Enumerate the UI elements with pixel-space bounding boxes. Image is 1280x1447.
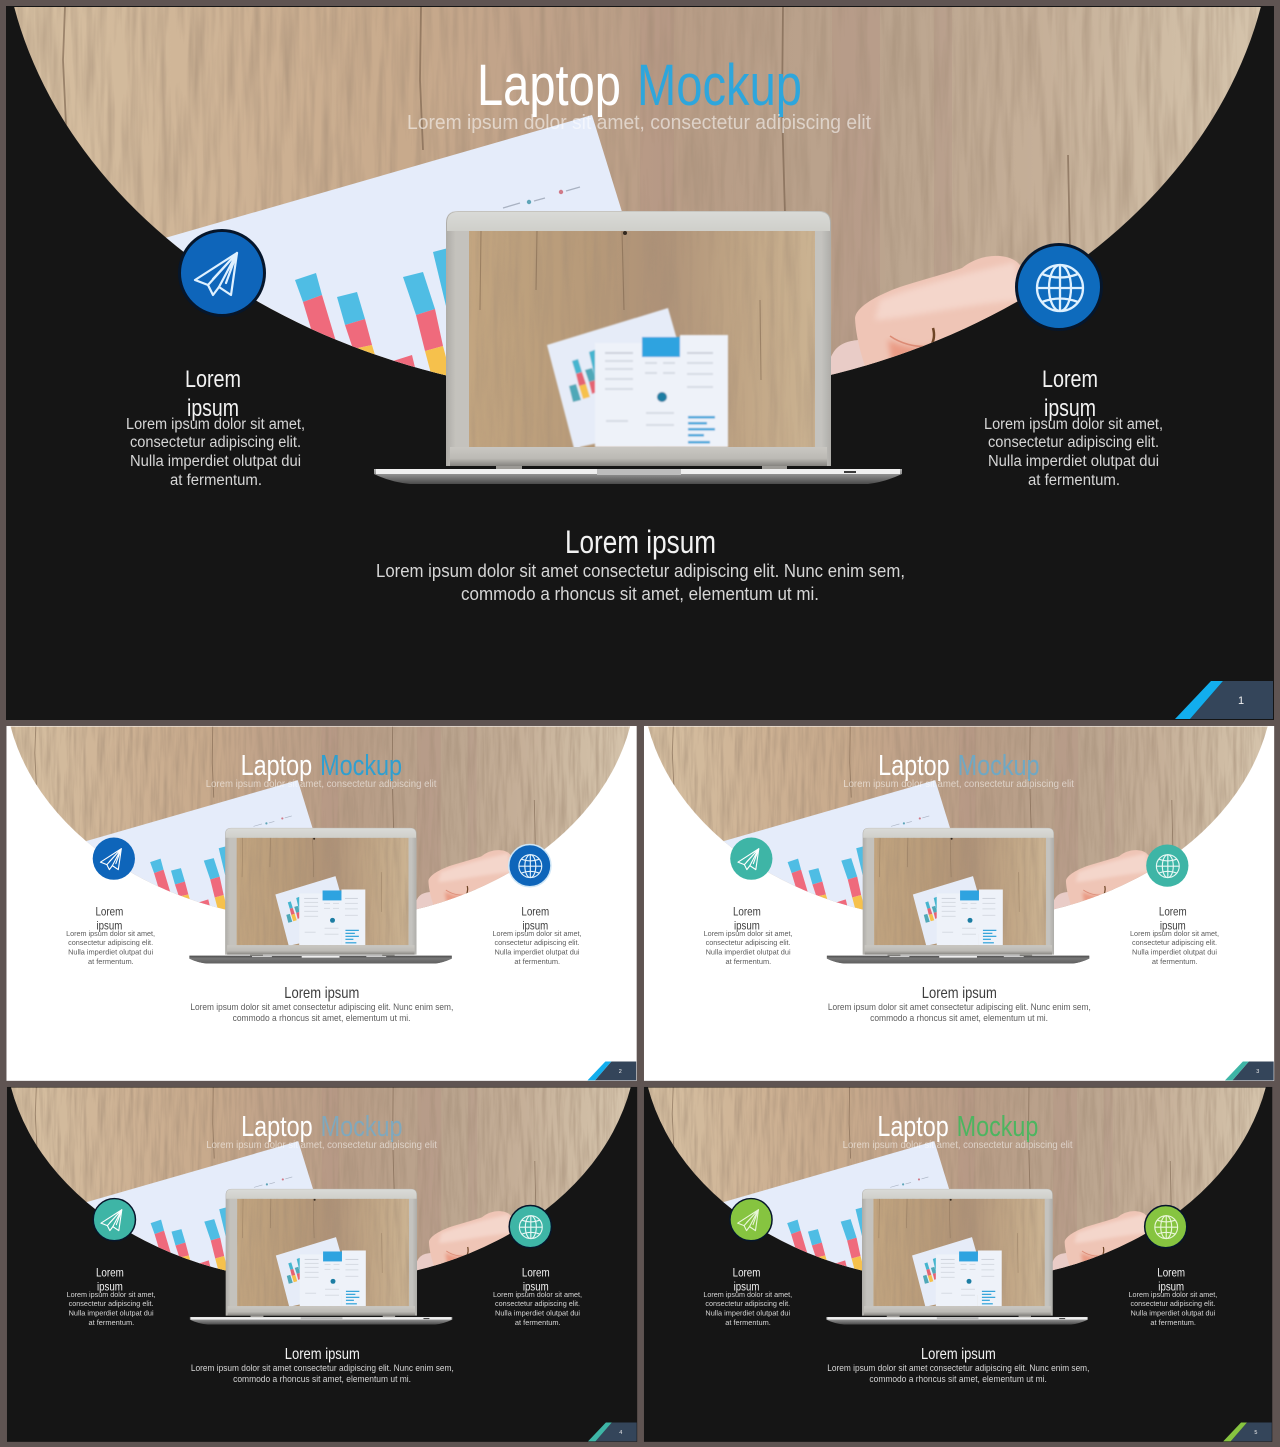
right feature text: Nulla imperdiet olutpat dui (1132, 948, 1217, 957)
left feature text: at fermentum. (170, 472, 262, 489)
panel: slide 2 white with blue accents (4, 723, 640, 1081)
left feature text (126, 366, 305, 489)
title (241, 1111, 403, 1143)
left feature text (703, 1265, 792, 1327)
right feature text: at fermentum. (1028, 472, 1120, 489)
left feature text: Lorem (733, 1265, 760, 1279)
title: Laptop (477, 53, 621, 118)
left feature text: Lorem (95, 904, 123, 918)
right feature text: consectetur adipiscing elit. (495, 1299, 580, 1308)
title: Laptop (241, 750, 312, 782)
centre text block: Lorem ipsum dolor sit amet consectetur adipiscing elit. Nunc enim sem, (828, 1002, 1091, 1012)
left feature text: Lorem (96, 1265, 124, 1279)
right feature text: ipsum (523, 1280, 549, 1294)
centre text block: commodo a rhoncus sit amet, elementum ut mi. (870, 1013, 1048, 1023)
right feature text: consectetur adipiscing elit. (1131, 1299, 1215, 1308)
left feature text: at fermentum. (725, 957, 771, 966)
right feature text: Nulla imperdiet olutpat dui (495, 948, 580, 957)
right feature text (493, 904, 582, 966)
page number tab: 1 (1238, 695, 1244, 707)
right feature text (984, 366, 1163, 489)
title: Mockup (957, 1111, 1038, 1143)
right feature text: at fermentum. (515, 1318, 561, 1327)
title: Mockup (320, 750, 402, 782)
page number tab: 3 (1256, 1069, 1259, 1075)
left feature text (704, 904, 793, 966)
right feature text: at fermentum. (514, 957, 560, 966)
right feature text: Nulla imperdiet olutpat dui (495, 1309, 580, 1318)
icon: globe badge (509, 845, 551, 887)
left feature text: consectetur adipiscing elit. (69, 1299, 154, 1308)
title: Laptop (878, 750, 950, 782)
page number tab (588, 1422, 637, 1441)
right feature text: consectetur adipiscing elit. (1132, 938, 1217, 947)
right feature text: Lorem (1042, 366, 1098, 393)
laptop base shading for light slide (189, 956, 452, 964)
right feature text: Lorem (521, 904, 549, 918)
right feature text: ipsum (1160, 919, 1186, 933)
hero artwork: wooden desk with laptop (0, 0, 1280, 484)
title (877, 1111, 1038, 1143)
icon: paper plane badge (93, 1199, 135, 1241)
page number tab: 4 (619, 1430, 622, 1436)
centre text block: commodo a rhoncus sit amet, elementum ut mi. (869, 1374, 1047, 1384)
left feature text: ipsum (187, 395, 239, 422)
right feature text: at fermentum. (1150, 1318, 1196, 1327)
centre text block (828, 985, 1091, 1023)
right feature text: Lorem ipsum dolor sit amet, (984, 416, 1163, 433)
left feature text: Lorem ipsum dolor sit amet, (126, 416, 305, 433)
centre text block: Lorem ipsum (284, 985, 359, 1002)
left feature text: ipsum (97, 1280, 123, 1294)
title: Mockup (637, 53, 802, 118)
centre text block (376, 524, 905, 604)
subtitle: Lorem ipsum dolor sit amet, consectetur adipiscing elit (407, 112, 871, 134)
left feature text: Nulla imperdiet olutpat dui (130, 453, 301, 470)
icon: globe badge (1146, 845, 1188, 887)
icon: paper plane badge (93, 838, 135, 880)
icon: globe badge (509, 1206, 551, 1248)
title (241, 750, 402, 782)
centre text block: Lorem ipsum (285, 1346, 360, 1363)
page number tab (1223, 1422, 1272, 1441)
panel: slide 1 large dark slide (0, 0, 1280, 720)
centre text block (190, 985, 453, 1023)
right feature text: consectetur adipiscing elit. (495, 938, 580, 947)
hero artwork (641, 723, 1277, 964)
panel: slide 5 dark with green accents (641, 1084, 1275, 1442)
icon: paper plane badge (180, 230, 264, 316)
left feature text: consectetur adipiscing elit. (130, 434, 301, 451)
right feature text: Lorem ipsum dolor sit amet, (493, 1290, 582, 1299)
subtitle: Lorem ipsum dolor sit amet, consectetur adipiscing elit (843, 1140, 1073, 1151)
left feature text: Lorem ipsum dolor sit amet, (704, 929, 793, 938)
title: Laptop (241, 1111, 313, 1143)
laptop base shading for light slide (827, 956, 1089, 964)
title: Mockup (958, 750, 1040, 782)
centre text block: Lorem ipsum (921, 1346, 996, 1363)
laptop mockup (374, 211, 902, 484)
page number tab (1225, 1061, 1274, 1080)
page number tab (1175, 681, 1273, 719)
left feature text: ipsum (734, 919, 760, 933)
left feature text: Lorem ipsum dolor sit amet, (66, 929, 155, 938)
laptop base (374, 469, 902, 484)
right feature text: at fermentum. (1152, 957, 1198, 966)
right feature text: Lorem (1157, 1265, 1185, 1279)
right feature text (1129, 1265, 1217, 1327)
laptop lid (446, 211, 831, 466)
left feature text: consectetur adipiscing elit. (705, 1299, 790, 1308)
left feature text: Nulla imperdiet olutpat dui (705, 1309, 790, 1318)
title (878, 750, 1040, 782)
hero artwork (641, 1084, 1275, 1325)
left feature text (66, 904, 155, 966)
left feature text: at fermentum. (725, 1318, 771, 1327)
page number tab (587, 1061, 636, 1080)
centre text block: Lorem ipsum (565, 524, 716, 560)
wooden bowl photo (0, 0, 1280, 430)
subtitle: Lorem ipsum dolor sit amet, consectetur adipiscing elit (206, 1140, 437, 1151)
hand photo (826, 256, 1032, 395)
left feature text: Lorem (185, 366, 241, 393)
left feature text (67, 1265, 156, 1327)
left feature text: consectetur adipiscing elit. (706, 938, 791, 947)
title: Mockup (321, 1111, 403, 1143)
right feature text: Lorem ipsum dolor sit amet, (1130, 929, 1219, 938)
right feature text: consectetur adipiscing elit. (988, 434, 1159, 451)
right feature text: Lorem (522, 1265, 550, 1279)
centre text block (827, 1346, 1089, 1384)
subtitle: Lorem ipsum dolor sit amet, consectetur adipiscing elit (843, 779, 1074, 790)
right feature text (493, 1265, 582, 1327)
title: Laptop (877, 1111, 949, 1143)
slide background (644, 726, 1274, 1081)
right feature text: ipsum (522, 919, 548, 933)
right feature text: Lorem ipsum dolor sit amet, (493, 929, 582, 938)
left feature text: consectetur adipiscing elit. (68, 938, 153, 947)
hero artwork (4, 1084, 640, 1325)
left feature text: Lorem ipsum dolor sit amet, (703, 1290, 792, 1299)
icon: globe badge (1145, 1206, 1187, 1248)
slide background (6, 6, 1274, 720)
laptop screen showing desk photo (469, 231, 815, 460)
slide background (7, 1087, 637, 1442)
document sheet with bar chart (120, 115, 640, 430)
right feature text: ipsum (1158, 1280, 1184, 1294)
icon: paper plane badge (730, 1199, 772, 1241)
panel: slide 3 white with teal accents (641, 723, 1277, 1081)
left feature text: Nulla imperdiet olutpat dui (68, 948, 153, 957)
page number tab: 5 (1254, 1430, 1257, 1436)
right feature text: ipsum (1044, 395, 1096, 422)
panel: slide 4 dark with teal accents (4, 1084, 640, 1442)
left feature text: at fermentum. (88, 1318, 134, 1327)
right feature text: Lorem (1159, 904, 1187, 918)
centre text block (191, 1346, 454, 1384)
right feature text: Nulla imperdiet olutpat dui (1131, 1309, 1216, 1318)
centre text block: Lorem ipsum dolor sit amet consectetur adipiscing elit. Nunc enim sem, (376, 561, 905, 581)
left feature text: Lorem (733, 904, 761, 918)
centre text block: commodo a rhoncus sit amet, elementum ut mi. (233, 1374, 411, 1384)
left feature text: Nulla imperdiet olutpat dui (706, 948, 791, 957)
right feature text: Nulla imperdiet olutpat dui (988, 453, 1159, 470)
slide background (6, 726, 637, 1081)
centre text block: Lorem ipsum (922, 985, 997, 1002)
icon: globe badge (1016, 244, 1102, 330)
centre text block: commodo a rhoncus sit amet, elementum ut mi. (233, 1013, 411, 1023)
centre text block: Lorem ipsum dolor sit amet consectetur adipiscing elit. Nunc enim sem, (827, 1363, 1089, 1373)
centre text block: Lorem ipsum dolor sit amet consectetur adipiscing elit. Nunc enim sem, (191, 1363, 454, 1373)
left feature text: ipsum (734, 1280, 759, 1294)
slide background (644, 1087, 1272, 1442)
right feature text (1130, 904, 1219, 966)
title (477, 53, 802, 118)
page number tab: 2 (619, 1069, 622, 1075)
left feature text: ipsum (96, 919, 122, 933)
centre text block: commodo a rhoncus sit amet, elementum ut mi. (461, 584, 819, 604)
icon: paper plane badge (730, 838, 772, 880)
hero artwork (4, 723, 640, 964)
left feature text: Lorem ipsum dolor sit amet, (67, 1290, 156, 1299)
right feature text: Lorem ipsum dolor sit amet, (1129, 1290, 1217, 1299)
left feature text: at fermentum. (88, 957, 134, 966)
subtitle: Lorem ipsum dolor sit amet, consectetur adipiscing elit (206, 779, 437, 790)
centre text block: Lorem ipsum dolor sit amet consectetur adipiscing elit. Nunc enim sem, (190, 1002, 453, 1012)
left feature text: Nulla imperdiet olutpat dui (69, 1309, 154, 1318)
